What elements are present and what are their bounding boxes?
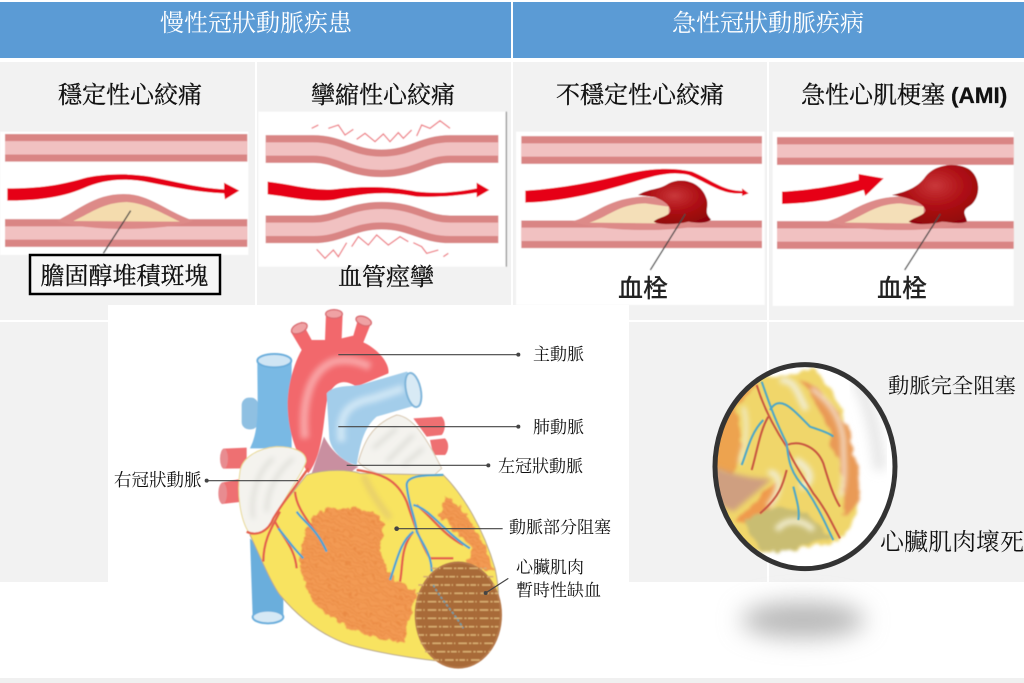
ischemic patch: [416, 562, 501, 668]
diagram: artery with cholesterol plaque: [0, 132, 248, 255]
inferior vena cava: [250, 538, 283, 623]
left atrium: [358, 415, 442, 475]
panel: acute myocardial infarction: [769, 62, 1024, 320]
label: transient ischemia: 暫時性缺血: [516, 580, 601, 600]
label: transient ischemia: 心臟肌肉: [516, 558, 584, 577]
label: left coronary artery: 左冠狀動脈: [498, 457, 583, 476]
lens drop shadow: [741, 602, 865, 638]
label: transient ischemia: [516, 558, 601, 600]
panel: variant angina: [257, 62, 511, 320]
leader lines: [205, 353, 520, 595]
header: acute coronary disease: [513, 2, 1024, 58]
heading: AMI: 急性心肌梗塞 (AMI): [801, 82, 1007, 109]
label: complete arterial occlusion: 動脈完全阻塞: [888, 374, 1016, 398]
pulmonary artery: [312, 372, 424, 475]
label: pulmonary artery: 肺動脈: [533, 418, 584, 437]
callout: cholesterol plaque: 膽固醇堆積斑塊: [40, 263, 208, 290]
right atrium: [239, 447, 306, 534]
pulmonary veins: [218, 398, 448, 504]
label: thrombus: 血栓: [877, 275, 927, 303]
header: chronic coronary disease: 慢性冠狀動脈疾患: [160, 10, 353, 37]
heading: stable angina: 穩定性心絞痛: [58, 82, 202, 109]
panel: stable angina: [0, 62, 255, 320]
magnified lens: infarcted heart area: [707, 364, 896, 569]
heart drawing: [205, 310, 520, 668]
illustration panel: heart anatomy: [108, 305, 629, 683]
panel: unstable angina: [513, 62, 767, 320]
label: vasospasm: 血管痙攣: [338, 264, 434, 291]
diagram: artery with large thrombus: [773, 132, 1014, 306]
label: partial arterial occlusion: 動脈部分阻塞: [509, 518, 611, 537]
label: aorta: 主動脈: [533, 345, 584, 364]
label: right coronary artery: 右冠狀動脈: [114, 470, 202, 490]
diagram: artery with thrombus: [516, 132, 765, 305]
header: chronic coronary disease: [0, 2, 511, 58]
heart muscle: [250, 470, 498, 663]
callout: cholesterol plaque: [30, 255, 220, 294]
label: thrombus: 血栓: [618, 275, 668, 303]
heading: variant angina: 攣縮性心絞痛: [311, 82, 455, 109]
diagram: artery spasm: [258, 112, 507, 267]
superior vena cava: [250, 354, 292, 448]
bottom rule: [0, 678, 1024, 683]
header: acute coronary disease: 急性冠狀動脈疾病: [672, 10, 864, 37]
coronary vessels: [247, 468, 470, 582]
aorta: [288, 310, 389, 473]
label: myocardial necrosis: 心臟肌肉壞死: [880, 529, 1024, 556]
lower band background: [0, 322, 1024, 582]
heading: unstable angina: 不穩定性心絞痛: [556, 82, 724, 109]
